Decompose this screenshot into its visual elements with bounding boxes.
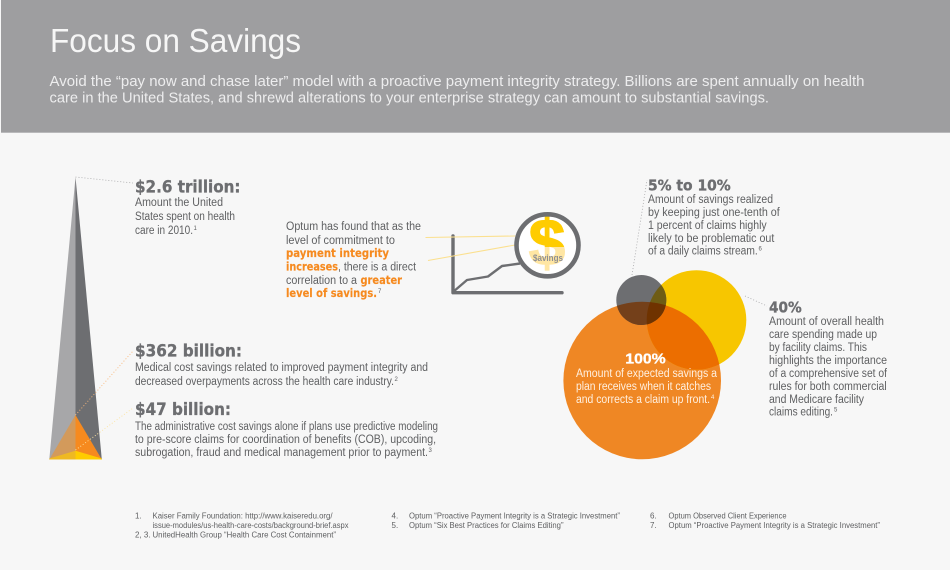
stat: 100% [576, 350, 718, 406]
text block: Optum correlation: level of savings. [286, 286, 377, 300]
stat: $2.6 trillion [135, 178, 240, 237]
venn diagram [563, 270, 746, 459]
footnotes column 3: 6. [650, 511, 657, 520]
overlap: all three [646, 302, 666, 324]
stat: $362 billion [135, 342, 428, 388]
stat: 40%: claims editing. [769, 406, 833, 418]
circle: 5% to 10% gray [616, 275, 666, 325]
footnotes column 3 [650, 511, 880, 530]
icon: magnifier with dollar sign: $avings [533, 253, 563, 264]
text block: Optum correlation: level of commitment to [286, 235, 395, 247]
stat: 40%: Amount of overall health [769, 316, 884, 328]
leader line: $2.6 trillion [76, 177, 133, 183]
pointer lines to magnifier [426, 236, 515, 260]
footnotes column 3: 7. [650, 521, 657, 530]
footnotes column 1: issue-modules/us-health-care-costs/background-brief.aspx [152, 521, 348, 530]
savings line chart with magnifier [426, 205, 578, 293]
stat: 40%: by facility claims. This [769, 342, 867, 354]
circle: 100% orange [563, 302, 721, 459]
leader line: $47 billion [76, 408, 133, 450]
stat: 5% to 10%: 6 [758, 246, 762, 252]
chart axes [453, 236, 562, 293]
footnotes column 3: Optum “Proactive Payment Integrity is a Strategic Investment” [668, 521, 880, 530]
footnotes [135, 511, 880, 540]
overlap: gray and yellow [648, 285, 666, 324]
footnotes column 1: Kaiser Family Foundation: http://www.kaiseredu.org/ [152, 511, 333, 520]
stat: $2.6 trillion: care in 2010. [135, 225, 193, 237]
footnotes column 1: 1. [135, 511, 142, 520]
stat: $2.6 trillion: 1 [194, 226, 198, 232]
text block: Optum correlation: payment integrity [286, 246, 389, 260]
stat: $47 billion [135, 400, 438, 459]
stat: $362 billion: decreased overpayments across the health care industry. [135, 376, 394, 388]
stat: 100%: and corrects a claim up front. [576, 394, 710, 406]
text block: Optum correlation: increases [286, 260, 338, 274]
stat: $2.6 trillion: Amount the United [135, 197, 223, 209]
stat: 100%: plan receives when it catches [576, 381, 711, 393]
leader line: 40% [745, 296, 767, 306]
stat: $47 billion: $47 billion: [135, 400, 231, 420]
stat: 5% to 10%: likely to be problematic out [648, 233, 775, 245]
footnotes column 1 [135, 511, 348, 540]
stat: $362 billion: 2 [394, 377, 398, 383]
pyramid chart [49, 177, 102, 460]
icon: magnifier with dollar sign: $ [529, 205, 565, 279]
footnotes column 2: 5. [392, 521, 398, 530]
stat: 5% to 10%: of a daily claims stream. [648, 246, 758, 258]
stat: 100%: 4 [711, 395, 715, 401]
header banner [1, 0, 950, 133]
stat: $47 billion: subrogation, fraud and medical management prior to payment. [135, 447, 428, 459]
footnotes column 1: UnitedHealth Group “Health Care Cost Containment” [152, 531, 336, 540]
stat: 40%: rules for both commercial [769, 381, 887, 393]
leader line: 5% to 10% [632, 180, 647, 275]
text block: Optum correlation: 7 [378, 289, 382, 295]
leader line: $362 billion [76, 351, 133, 415]
overlap: orange and yellow [647, 306, 720, 370]
text block: Optum correlation [286, 221, 421, 300]
stat: $2.6 trillion: States spent on health [135, 211, 235, 223]
footnotes column 1: 2, 3. [135, 531, 151, 540]
stat: $362 billion: $362 billion: [135, 342, 242, 362]
stat: 40%: care spending made up [769, 329, 877, 341]
stat: 5% to 10%: 1 percent of claims highly [648, 220, 767, 232]
text block: Optum correlation: , there is a direct [338, 262, 417, 274]
footnotes column 2 [392, 511, 620, 530]
text block: Optum correlation: correlation to a [286, 275, 358, 287]
intro paragraph: care in the United States, and shrewd alterations to your enterprise strategy can amount to substantial savings. [50, 91, 769, 107]
stat: 40%: and Medicare facility [769, 394, 864, 406]
icon: magnifier with dollar sign: $ [529, 205, 565, 279]
overlap: gray and orange [617, 302, 666, 325]
title: Focus on Savings [50, 22, 301, 59]
stat: 100%: 100% [625, 350, 666, 367]
stat: 5% to 10%: by keeping just one-tenth of [648, 207, 780, 219]
stat: $47 billion: 3 [428, 448, 432, 454]
intro paragraph: Avoid the “pay now and chase later” model with a proactive payment integrity strategy. Billions are spent annually on health [50, 74, 864, 90]
footnotes column 2: 4. [392, 511, 398, 520]
stat: 5% to 10%: 5% to 10% [648, 177, 731, 195]
footnotes column 2: Optum “Proactive Payment Integrity is a Strategic Investment” [409, 511, 620, 520]
text block: Optum correlation: greater [360, 273, 402, 287]
stat: 5% to 10%: Amount of savings realized [648, 194, 773, 206]
footnotes column 2: Optum “Six Best Practices for Claims Editing” [409, 521, 564, 530]
stat: 40% [769, 298, 888, 418]
stat: 5% to 10% [648, 177, 780, 258]
stat: 40%: 5 [834, 408, 838, 414]
intro paragraph [50, 74, 864, 107]
circle: 40% yellow [647, 270, 746, 370]
stat: $47 billion: to pre-score claims for coordination of benefits (COB), upcoding, [135, 434, 436, 446]
stat: 40%: highlights the importance [769, 355, 887, 367]
chart trend line [453, 264, 520, 292]
stat: $362 billion: Medical cost savings related to improved payment integrity and [135, 362, 428, 374]
stat: $2.6 trillion: $2.6 trillion: [135, 178, 240, 198]
icon: magnifier with dollar sign [516, 205, 578, 279]
stat: $47 billion: The administrative cost savings alone if plans use predictive modeling [135, 421, 438, 433]
footnotes column 3: Optum Observed Client Experience [668, 511, 787, 520]
stat: 40%: of a comprehensive set of [769, 368, 888, 380]
stat: 100%: Amount of expected savings a [576, 368, 718, 380]
text block: Optum correlation: Optum has found that as the [286, 221, 421, 233]
stat: 40%: 40% [769, 298, 802, 316]
